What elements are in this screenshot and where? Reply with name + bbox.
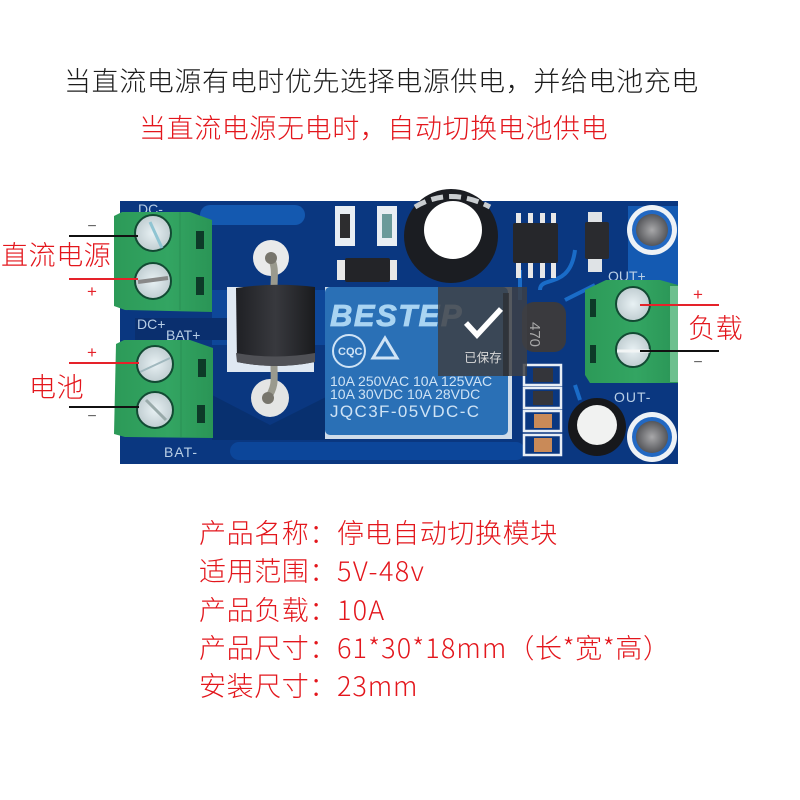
callout: battery lines [29,343,139,425]
mounting holes [627,205,677,462]
smd resistor column [524,365,561,455]
callout: load lines: − [693,354,703,371]
pcb [120,201,678,464]
callout: load lines [640,285,743,371]
relay: 10A 30VDC 10A 28VDC [330,386,480,402]
diode: large axial [227,240,315,417]
smd diode right [585,212,609,272]
callout: battery lines: 电池 [29,366,84,405]
silkscreen labels: OUT+ [608,268,646,284]
callout: DC power lines: 直流电源 [1,234,111,273]
callout: load lines: 负载 [688,307,743,346]
relay: BESTEP [330,298,463,333]
silkscreen labels [137,201,651,460]
ic chip [513,213,558,278]
smd parts top [335,206,397,246]
terminal: battery [114,340,213,438]
silkscreen labels: BAT- [164,444,198,460]
heading: black line: 当直流电源有电时优先选择电源供电，并给电池充电 [64,60,699,99]
product specification text: 产品负载：10A [199,589,385,628]
callout: load lines: + [693,285,703,304]
relay: CQC [338,346,362,358]
callout: DC power lines: − [87,218,97,235]
product specification text: 安装尺寸：23mm [199,665,418,704]
product specification text: 适用范围：5V-48v [199,550,425,589]
relay: JQC3F-05VDC-C [330,402,480,421]
relay: 10A 250VAC 10A 125VAC [330,373,492,389]
relay [325,287,512,439]
electrolytic capacitor bottom [568,398,626,456]
small smd diode [337,258,397,282]
product specification text: 产品名称：停电自动切换模块 [199,512,558,551]
product specification text: 产品尺寸：61*30*18mm（长*宽*高） [199,627,671,666]
silkscreen labels: OUT- [614,389,651,405]
electrolytic capacitor top [404,189,498,283]
callout: battery lines: + [87,343,97,362]
silkscreen labels: DC+ [137,316,165,332]
saved toast overlay: 已保存 [464,347,502,366]
heading: red line: 当直流电源无电时，自动切换电池供电 [139,107,608,146]
silkscreen labels: DC- [138,201,163,217]
circuit board module [114,189,678,464]
terminal: DC [114,212,212,312]
silkscreen labels: BAT+ [166,327,200,343]
callout: battery lines: − [87,408,97,425]
inductor: 470 [526,322,543,347]
callout: DC power lines [1,218,138,301]
saved toast overlay [438,287,527,376]
inductor [522,302,566,352]
terminal: output [585,280,678,383]
product specification text [199,512,671,704]
callout: DC power lines: + [87,282,97,301]
icon: check mark [466,309,501,335]
